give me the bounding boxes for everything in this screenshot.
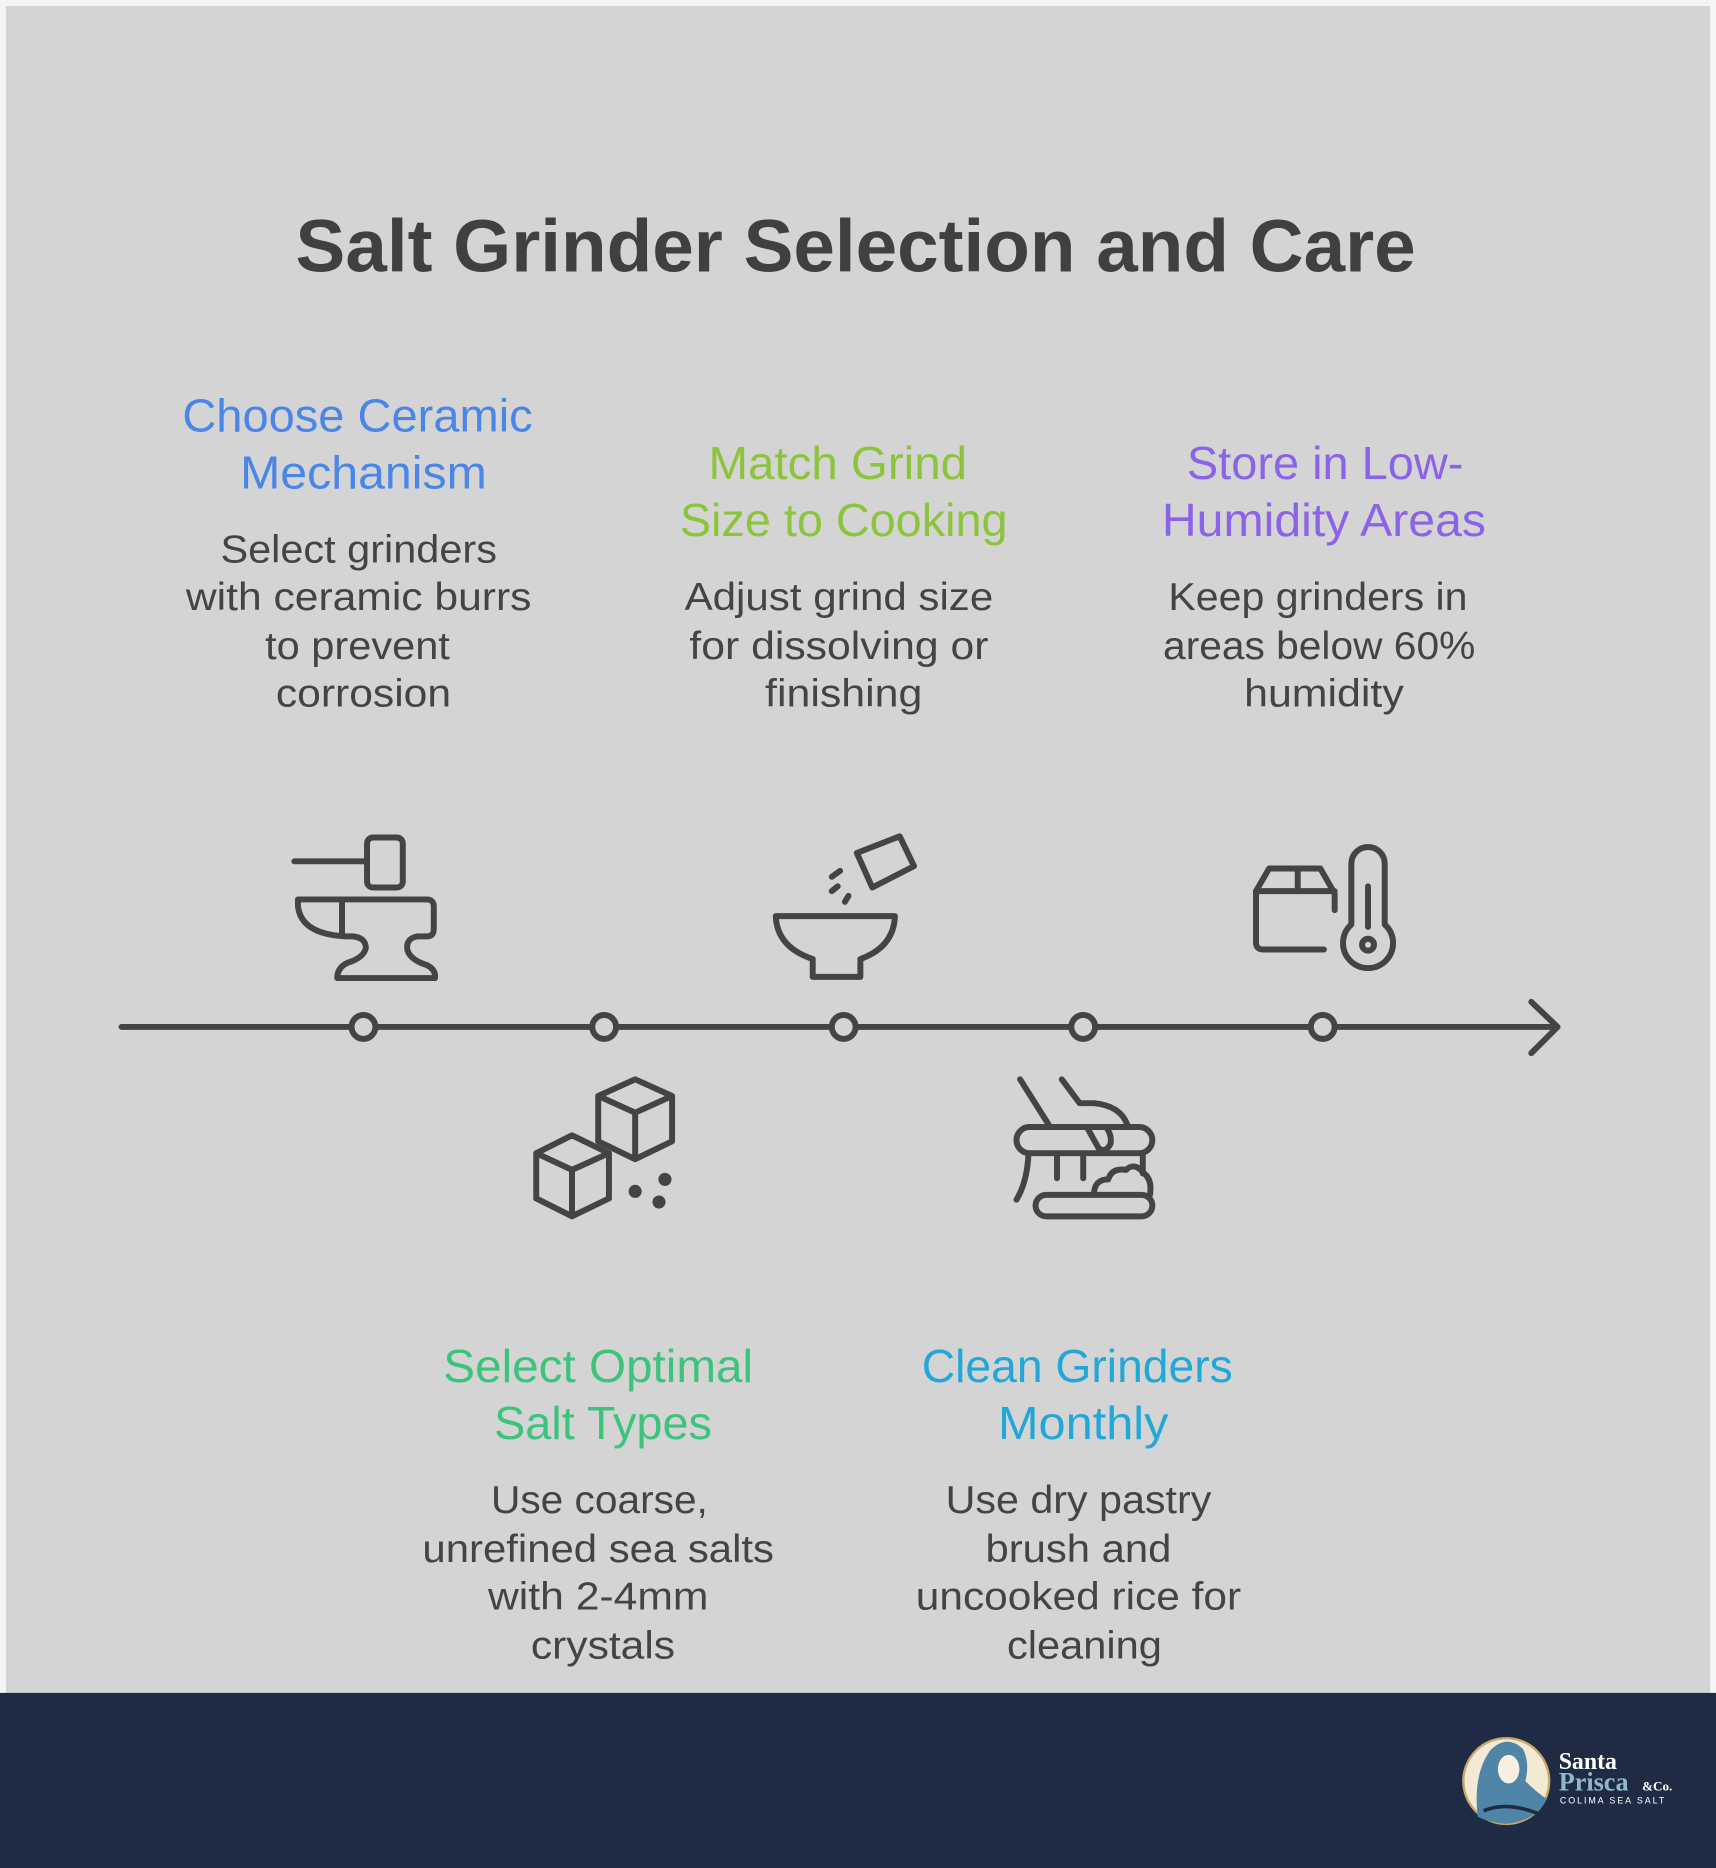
step 1: choose ceramic mechanism: Mechanism bbox=[240, 446, 487, 498]
step 1: choose ceramic mechanism: corrosion bbox=[276, 671, 451, 715]
step 2: match grind size bbox=[680, 437, 1008, 715]
footer bbox=[0, 1693, 1716, 1868]
step 5: clean grinders monthly bbox=[916, 1340, 1241, 1667]
logo: Santa Prisca & Co. bbox=[1463, 1738, 1672, 1824]
title: Salt Grinder Selection and Care bbox=[296, 205, 1416, 288]
step 5: clean grinders monthly: uncooked rice for bbox=[916, 1574, 1241, 1618]
icon: anvil and hammer bbox=[294, 838, 435, 978]
logo: Santa Prisca & Co.: Santa bbox=[1559, 1749, 1617, 1775]
step 4: select optimal salt types bbox=[422, 1340, 774, 1667]
step 5: clean grinders monthly: brush and bbox=[986, 1527, 1171, 1571]
step 4: select optimal salt types: Use coarse, bbox=[491, 1478, 708, 1522]
logo: Santa Prisca & Co.: COLIMA SEA SALT bbox=[1560, 1796, 1666, 1806]
step 1: choose ceramic mechanism bbox=[182, 389, 533, 715]
step 2: match grind size: Match Grind bbox=[708, 437, 967, 489]
logo: Santa Prisca & Co.: Prisca bbox=[1559, 1768, 1629, 1797]
step 3: store in low humidity: areas below 60% bbox=[1163, 624, 1475, 668]
step 1: choose ceramic mechanism: with ceramic burrs bbox=[185, 575, 531, 619]
step 4: select optimal salt types: crystals bbox=[531, 1623, 675, 1667]
step 5: clean grinders monthly: Use dry pastry bbox=[946, 1478, 1212, 1522]
icon: cleaning brush bbox=[1016, 1079, 1152, 1216]
step 2: match grind size: for dissolving or bbox=[689, 624, 988, 668]
step 1: choose ceramic mechanism: to prevent bbox=[265, 624, 450, 668]
logo: Santa Prisca & Co.: &Co. bbox=[1642, 1779, 1672, 1794]
step 5: clean grinders monthly: cleaning bbox=[1007, 1623, 1162, 1667]
step 3: store in low humidity: Keep grinders in bbox=[1168, 575, 1468, 619]
step 4: select optimal salt types: with 2-4mm bbox=[487, 1574, 708, 1618]
step 3: store in low humidity: humidity bbox=[1244, 671, 1404, 715]
step 1: choose ceramic mechanism: Choose Ceramic bbox=[182, 389, 533, 441]
step 2: match grind size: finishing bbox=[765, 671, 922, 715]
step 2: match grind size: Size to Cooking bbox=[680, 494, 1008, 546]
step 5: clean grinders monthly: Monthly bbox=[998, 1397, 1169, 1449]
step 2: match grind size: Adjust grind size bbox=[685, 575, 993, 619]
step 4: select optimal salt types: unrefined sea salts bbox=[422, 1527, 774, 1571]
step 1: choose ceramic mechanism: Select grinders bbox=[220, 527, 497, 571]
timeline arrow bbox=[122, 1002, 1558, 1053]
step 4: select optimal salt types: Salt Types bbox=[494, 1397, 712, 1449]
step 3: store in low humidity bbox=[1162, 437, 1486, 715]
step 3: store in low humidity: Store in Low- bbox=[1187, 437, 1463, 489]
icon: bowl with shaker bbox=[776, 836, 914, 977]
icon: salt cubes bbox=[536, 1079, 672, 1216]
step 3: store in low humidity: Humidity Areas bbox=[1162, 494, 1486, 546]
step 5: clean grinders monthly: Clean Grinders bbox=[922, 1340, 1233, 1392]
icon: box and thermometer bbox=[1256, 847, 1393, 968]
step 4: select optimal salt types: Select Optimal bbox=[443, 1340, 753, 1392]
